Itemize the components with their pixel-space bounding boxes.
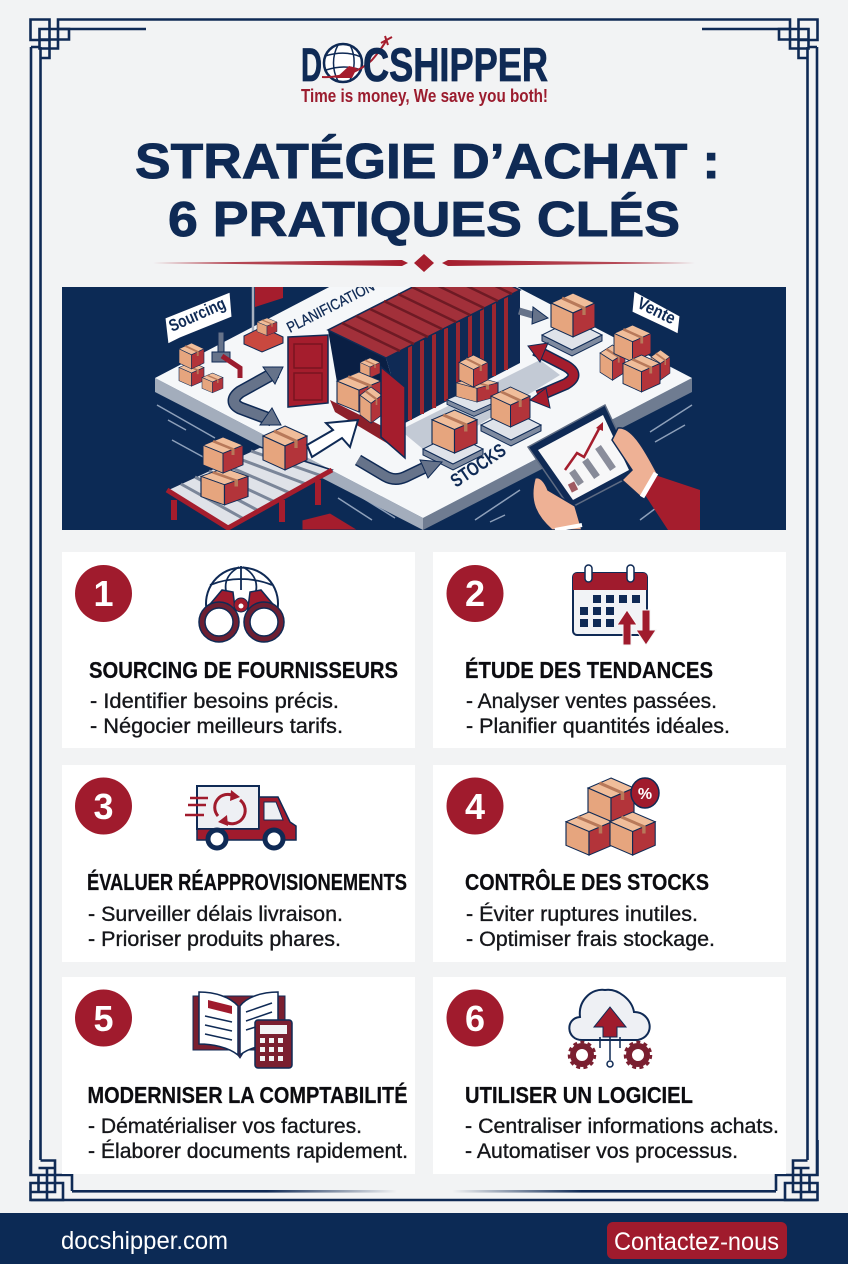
heading 3: ÉVALUER RÉAPPROVISIONEMENTS <box>87 868 407 895</box>
heading 5: MODERNISER LA COMPTABILITÉ <box>88 1081 408 1108</box>
icon: open book and calculator <box>193 992 292 1068</box>
tagline: Time is money, We save you both! <box>301 86 548 106</box>
label: Planification: PLANIFICATION <box>284 278 377 337</box>
footer website: docshipper.com <box>61 1227 228 1255</box>
number badge 6 <box>446 990 504 1046</box>
shipping container <box>287 287 522 460</box>
title line 2: 6 PRATIQUES CLÉS <box>168 193 680 247</box>
tablet with chart <box>528 405 637 508</box>
panel: card 6 <box>433 977 786 1174</box>
body text 3 <box>88 903 343 951</box>
logo: DocShipper <box>301 36 548 106</box>
body text 1 <box>90 690 343 738</box>
icon: boxes with percent: % <box>638 786 652 803</box>
body text 1: - Négocier meilleurs tarifs. <box>90 715 343 738</box>
body text 2: - Analyser ventes passées. <box>466 690 717 713</box>
platform <box>155 287 692 530</box>
body text 2: - Planifier quantités idéales. <box>466 715 730 738</box>
body text 6 <box>465 1115 779 1163</box>
logo globe <box>322 36 392 82</box>
panel: card 1 <box>62 552 415 748</box>
body text 4 <box>466 903 715 951</box>
arrow: gray top right <box>519 307 548 324</box>
body text 4: - Éviter ruptures inutiles. <box>466 903 698 926</box>
body text 3: - Prioriser produits phares. <box>88 928 341 951</box>
shadow under container <box>406 360 560 448</box>
number badge 3 <box>75 778 132 834</box>
body text 5: - Élaborer documents rapidement. <box>88 1140 408 1163</box>
body text 2 <box>466 690 730 738</box>
body text 5 <box>88 1115 408 1163</box>
number badge 2 <box>446 565 504 622</box>
heading 2: ÉTUDE DES TENDANCES <box>465 656 713 683</box>
button: contact: Contactez-nous <box>614 1228 779 1256</box>
stock boxes <box>423 355 541 470</box>
sales area <box>542 293 670 392</box>
body text 6: - Automatiser vos processus. <box>465 1140 738 1163</box>
sourcing area <box>179 287 283 393</box>
arrow: gray double <box>234 367 283 425</box>
number badge 5 <box>75 990 132 1046</box>
arrow: red double <box>528 343 574 408</box>
arrow: gray bottom <box>358 460 442 479</box>
label: Sourcing bubble: Sourcing <box>166 294 228 336</box>
panel: card 5 <box>62 977 415 1174</box>
number badge 1 <box>75 565 132 622</box>
icon: calendar with arrows <box>573 565 656 645</box>
body text 4: - Optimiser frais stockage. <box>466 928 715 951</box>
number badge 2: 2 <box>465 573 485 614</box>
panel: card 3 <box>62 765 415 962</box>
icon: boxes with percent <box>566 778 659 855</box>
icon: delivery truck <box>185 786 296 848</box>
footer bar <box>0 1213 848 1264</box>
body text 3: - Surveiller délais livraison. <box>88 903 343 926</box>
icon: binoculars and globe <box>199 566 284 642</box>
arrow: white <box>307 420 358 457</box>
body text 5: - Dématérialiser vos factures. <box>88 1115 362 1138</box>
boxes in container <box>337 358 382 423</box>
heading 6: UTILISER UN LOGICIEL <box>465 1082 693 1108</box>
icon: cloud upload with gears <box>569 990 651 1068</box>
hero illustration: logistics platform <box>62 287 786 530</box>
title <box>135 135 720 247</box>
number badge 4: 4 <box>465 786 485 827</box>
body text 1: - Identifier besoins précis. <box>90 690 339 713</box>
body text 6: - Centraliser informations achats. <box>465 1115 779 1138</box>
number badge 3: 3 <box>93 786 114 827</box>
heading 1: SOURCING DE FOURNISSEURS <box>89 657 398 683</box>
conveyor belt <box>167 426 358 540</box>
logo letter D: D <box>301 38 322 91</box>
sleeve <box>645 475 700 530</box>
number badge 6: 6 <box>465 998 485 1039</box>
label: Stocks: STOCKS <box>447 440 510 492</box>
number badge 5: 5 <box>93 998 114 1039</box>
hands <box>533 428 657 530</box>
heading 4: CONTRÔLE DES STOCKS <box>465 868 709 895</box>
title line 1: STRATÉGIE D’ACHAT : <box>135 135 720 189</box>
panel: card 4 <box>433 765 786 962</box>
label: Vente bubble: Vente <box>634 294 679 328</box>
title divider ornament <box>153 254 695 272</box>
logo wordmark: CSHIPPER <box>363 38 548 91</box>
number badge 4 <box>446 778 504 834</box>
panel: card 2 <box>433 552 786 748</box>
number badge 1: 1 <box>93 573 114 614</box>
label: Sourcing bubble <box>165 292 232 344</box>
